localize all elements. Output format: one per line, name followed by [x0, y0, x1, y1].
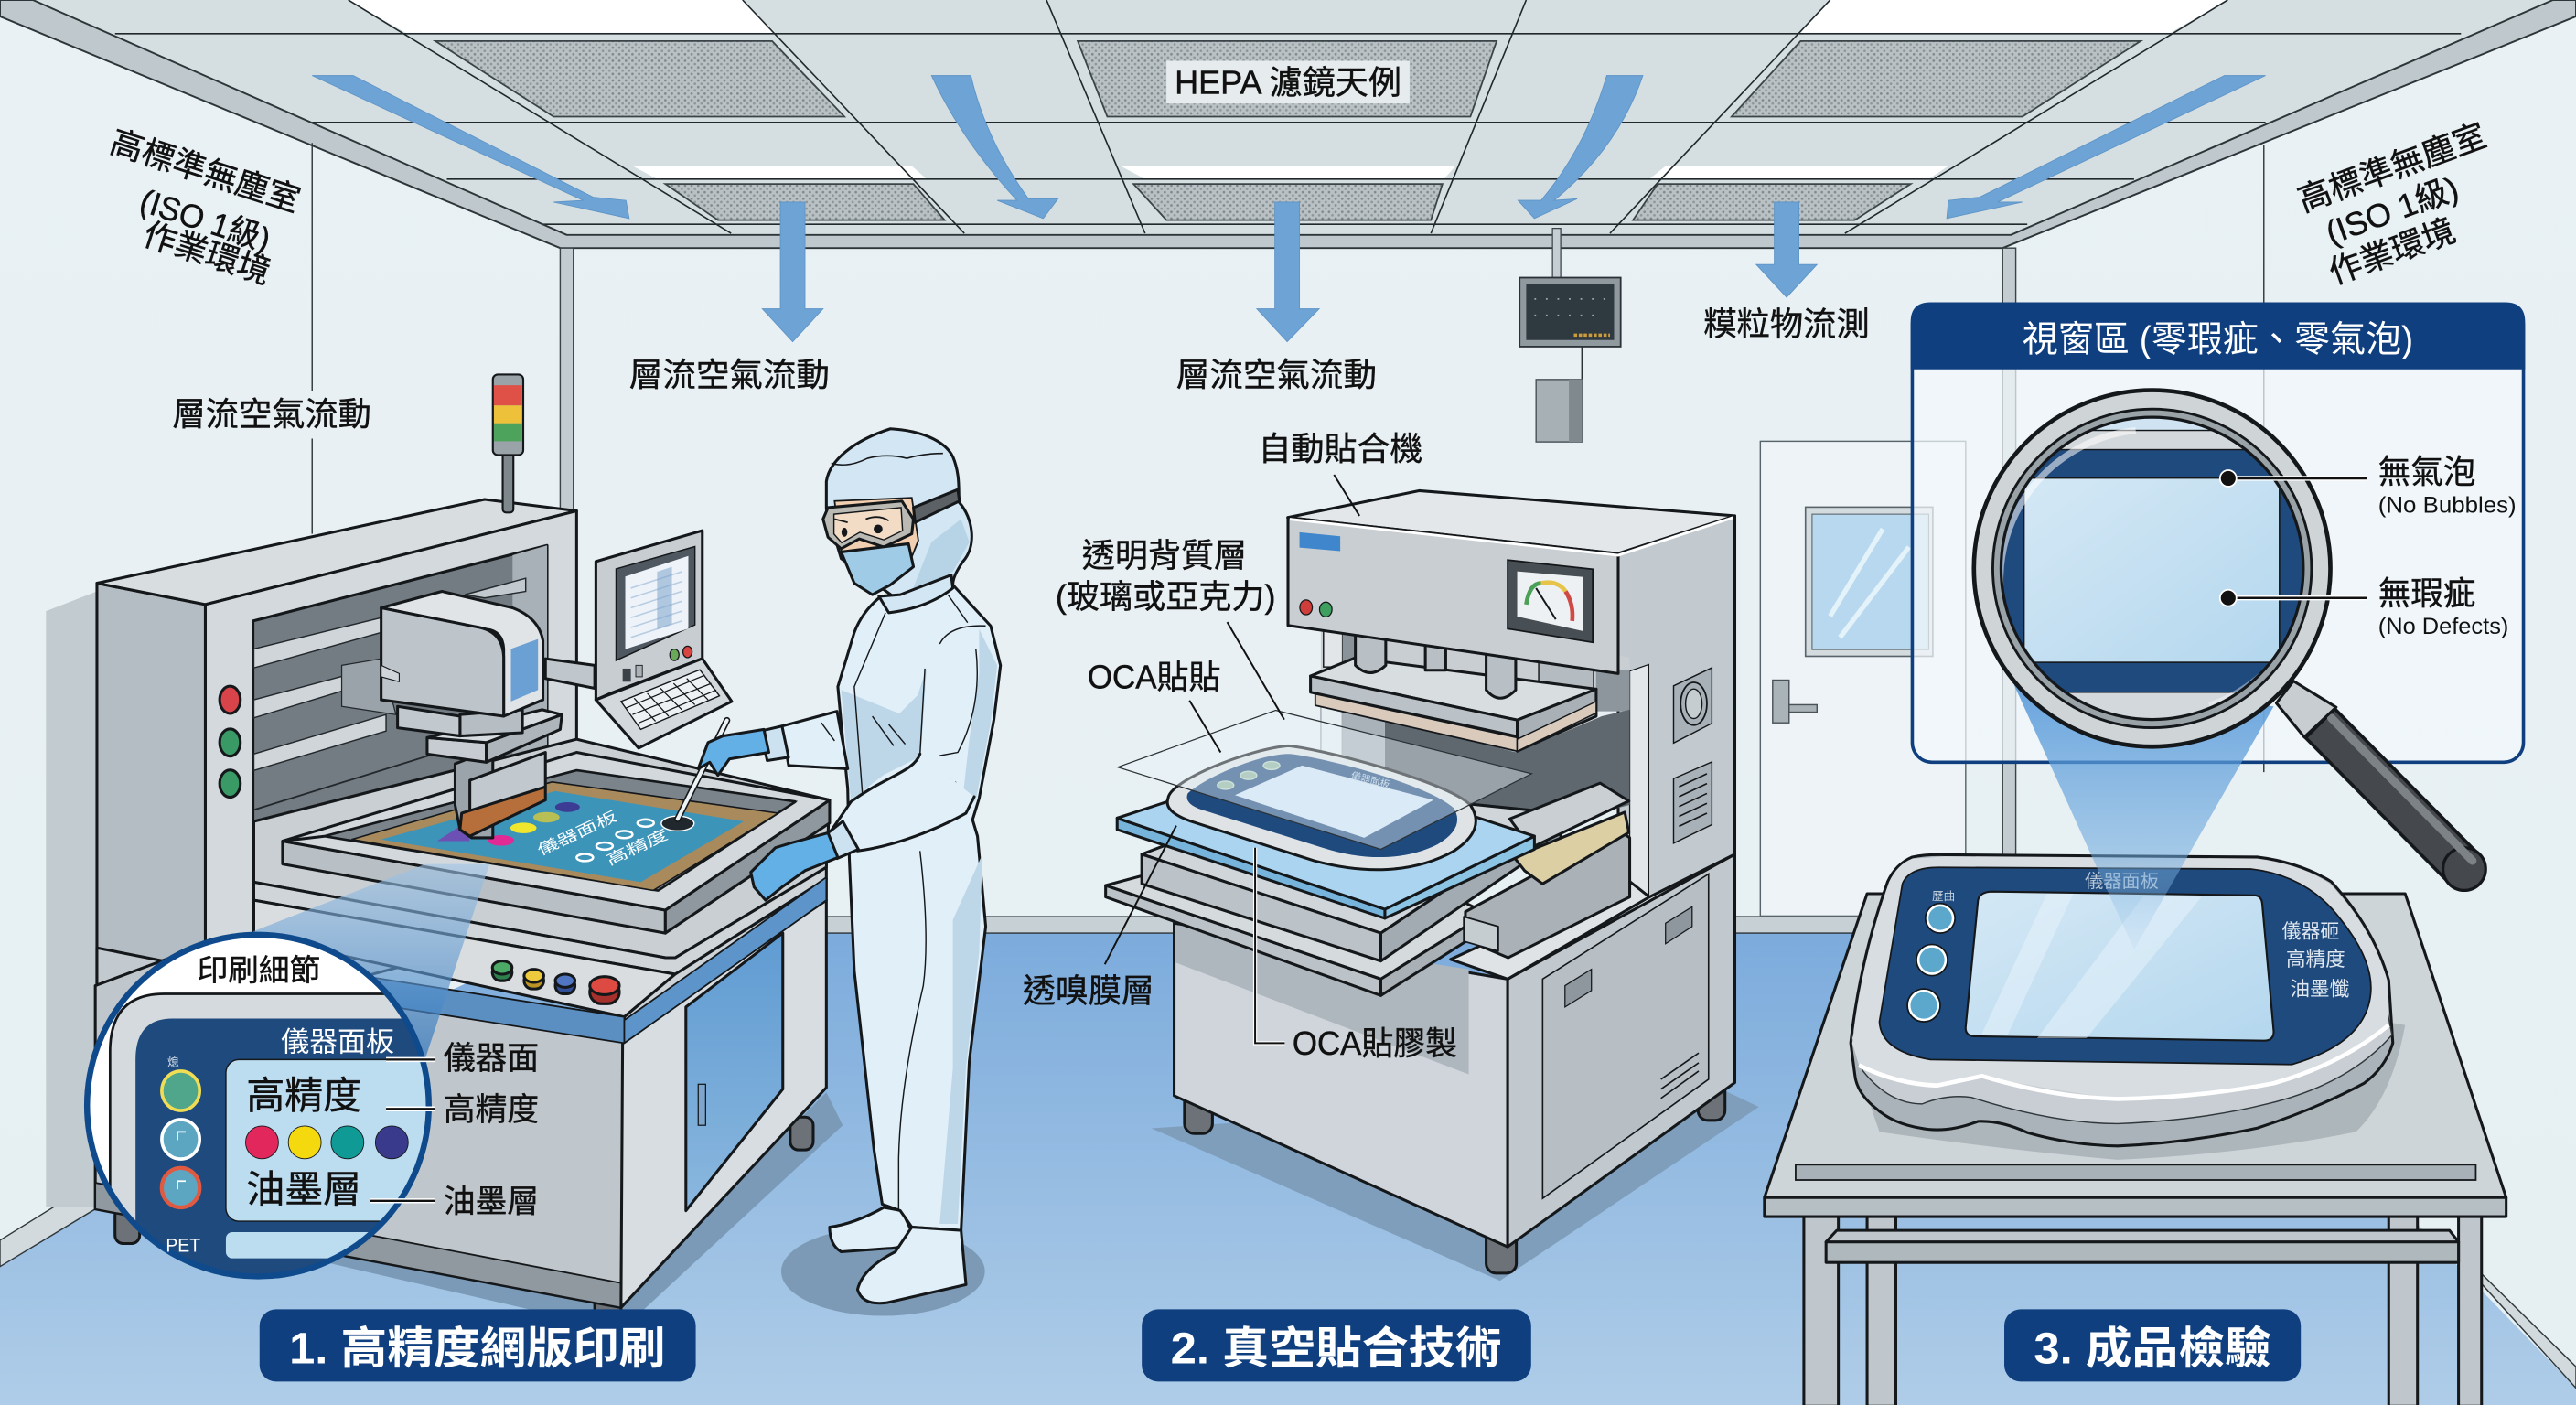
press dark cavity — [1385, 710, 1630, 830]
printed colour dots — [437, 802, 580, 846]
panel body — [1912, 306, 2524, 762]
label: left cleanroom note: 作業環境 — [139, 215, 275, 291]
callout: no bubbles: (No Bubbles) — [2378, 492, 2517, 518]
face — [834, 498, 918, 584]
machine 1 table — [253, 739, 830, 1043]
detail panel title: 儀器面板 — [281, 1026, 394, 1057]
press head front — [1288, 518, 1618, 673]
table slot — [1796, 1164, 2475, 1180]
tan film and rail — [1509, 783, 1629, 884]
machine 1 cabinet front — [95, 945, 624, 1308]
operator cuff — [828, 821, 858, 859]
machine 1 opening with rails — [253, 545, 547, 920]
callout: no bubbles: 無氣泡 — [2378, 453, 2475, 490]
lens ring — [2001, 417, 2303, 720]
table top — [1765, 894, 2506, 1197]
blue base plate — [1117, 759, 1534, 918]
printed panel text — [535, 809, 671, 869]
machine 1 tower light — [493, 374, 523, 512]
collar — [879, 575, 953, 613]
machine 2 floor shadow — [1152, 1090, 1759, 1281]
magnifier handle fill — [2322, 724, 2463, 867]
printed panel text: 高精度 — [604, 826, 671, 869]
wall corner posts and seams — [312, 143, 2264, 938]
hood shade — [912, 520, 970, 592]
goggle lens — [834, 508, 903, 542]
ink puddle — [661, 816, 694, 831]
finished instrument panel — [1851, 854, 2405, 1160]
detail leader: precision: 高精度 — [444, 1092, 539, 1128]
wand highlight — [678, 721, 727, 819]
press head buttons — [1300, 600, 1332, 617]
callout: no defects: (No Defects) — [2378, 614, 2508, 639]
print head — [381, 592, 562, 838]
hood cap seam — [832, 454, 943, 465]
callout: no defects: 無瑕疵 — [2378, 574, 2475, 612]
magnifier neck — [2276, 681, 2336, 737]
press cavity left panes — [1321, 698, 1385, 772]
magnifier handle end — [2443, 848, 2485, 890]
callout panel: viewing area — [1911, 302, 2525, 762]
operator floor shadow — [781, 1228, 985, 1316]
operator forearm — [830, 754, 974, 851]
label: lower film layer: 透嗅膜層 — [1023, 972, 1154, 1010]
step 3 heading: 3. 成品檢驗 — [2034, 1325, 2271, 1374]
transparent substrate sheet — [1118, 711, 1531, 849]
lens content — [2002, 419, 2302, 718]
lower deck — [1106, 830, 1487, 995]
goggles — [823, 501, 914, 549]
side block — [1451, 830, 1649, 979]
label: lower film layer — [1023, 826, 1176, 1010]
goggle strap — [914, 489, 960, 522]
label: right cleanroom note: 作業環境 — [2324, 211, 2460, 292]
callout: no defects — [2220, 574, 2508, 639]
label: right cleanroom note — [2293, 116, 2491, 292]
label: transparent substrate: 透明背質層 — [1082, 537, 1247, 574]
panel text: 高精度 — [2286, 948, 2345, 971]
magnifier rim — [1974, 391, 2331, 746]
HEPA filter panels — [435, 41, 2141, 220]
screen printing frame — [283, 753, 830, 933]
middle deck — [1142, 788, 1561, 961]
machine 2 cabinet door — [1542, 874, 1709, 1198]
detail contents — [108, 992, 426, 1273]
magnifying glass — [1971, 388, 2485, 890]
machine 1 front frame — [205, 511, 576, 1018]
label: OCA film: OCA貼貼 — [1088, 658, 1220, 695]
panel base — [1851, 854, 2393, 1146]
operator rear sleeve and cuff — [761, 712, 848, 768]
panel top face — [1852, 856, 2388, 1099]
detail circle base — [87, 935, 429, 1276]
panel window reflections — [1981, 894, 2202, 1038]
press plate — [1311, 658, 1596, 751]
particle sensor — [1519, 229, 1621, 442]
label: transparent substrate — [1056, 537, 1284, 720]
panel text — [1932, 872, 2349, 1000]
label: OCA bonding — [1255, 848, 1457, 1062]
panel navy bezel — [1880, 867, 2371, 1065]
baseboards — [0, 917, 2576, 1389]
label: right cleanroom note: (ISO 1級) — [2321, 169, 2463, 252]
pressing rods — [1356, 631, 1516, 698]
small panel on plate — [1167, 745, 1476, 870]
magnifier inner rim — [1992, 409, 2312, 728]
rear door — [1760, 441, 1966, 916]
operator rear shoe — [830, 1207, 914, 1251]
detail PET: PET — [166, 1233, 200, 1256]
label: right cleanroom note: 高標準無塵室 — [2293, 116, 2491, 219]
ceiling trim — [0, 0, 2576, 248]
step 2 heading: 2. 真空貼合技術 — [1171, 1325, 1501, 1374]
operator suit creases — [854, 595, 986, 1211]
detail ring — [87, 935, 429, 1276]
machine 1 control buttons — [492, 961, 619, 1003]
label: laminar flow left: 層流空氣流動 — [173, 395, 371, 433]
step 2 heading — [1142, 1309, 1531, 1381]
magnifier handle — [2320, 723, 2464, 869]
label: HEPA: HEPA 濾鏡天例 — [1175, 63, 1401, 101]
step 1 heading — [260, 1309, 696, 1381]
machine 1: screen printer — [46, 374, 843, 1331]
small panel text: 儀器面板 — [1350, 770, 1391, 791]
machine 1 top — [97, 499, 576, 605]
label: OCA film — [1088, 658, 1220, 753]
label: left cleanroom note — [106, 123, 305, 291]
pressure gauge — [1508, 560, 1593, 642]
panel highlight wave — [1859, 1025, 2388, 1099]
panel shadow — [1863, 1018, 2405, 1160]
magnifier handle highlight — [2331, 718, 2473, 861]
panel text: 油墨懺 — [2291, 977, 2349, 1000]
machine 2 feet — [1185, 1067, 1725, 1273]
panel window — [1966, 892, 2274, 1041]
upper glove — [698, 729, 768, 776]
eyes — [834, 517, 889, 537]
label: transparent substrate: (玻璃或亞克力) — [1056, 577, 1276, 615]
panel mid band — [1852, 986, 2392, 1123]
machine 2 cabinet front — [1175, 923, 1508, 1247]
ceiling — [33, 0, 2553, 235]
label: laminator: 自動貼合機 — [1259, 430, 1422, 467]
panel text: 歷曲 — [1932, 890, 1955, 903]
machine 2 column — [1618, 516, 1734, 897]
inspection table — [1765, 894, 2506, 1405]
label: particle monitor: 糢粒物流測 — [1703, 305, 1870, 342]
hood — [826, 429, 971, 598]
printed panel text: 儀器面板 — [535, 809, 619, 859]
step 1 heading: 1. 高精度網版印刷 — [289, 1325, 665, 1374]
print detail circle — [87, 935, 539, 1314]
detail title: 印刷細節 — [198, 954, 320, 988]
label: OCA bonding: OCA貼膠製 — [1293, 1024, 1457, 1062]
machine 1 floor shadow — [95, 1092, 843, 1331]
operator in cleanroom suit — [678, 429, 1001, 1316]
machine 1 side — [97, 584, 205, 1228]
table front edge — [1765, 1197, 2506, 1217]
label: laminar flow center: 層流空氣流動 — [1176, 356, 1377, 393]
table legs — [1804, 1216, 2482, 1405]
wand — [678, 721, 727, 819]
panel text: 儀器砸 — [2282, 919, 2339, 942]
inspection beam — [2014, 685, 2274, 949]
machine 1 feet — [115, 1117, 813, 1319]
detail high precision: 高精度 — [246, 1075, 361, 1117]
label: laminator — [1259, 430, 1422, 516]
machine 1 wall shadow — [46, 592, 97, 1207]
detail tiny label: 熄 — [167, 1056, 179, 1069]
console — [545, 531, 732, 748]
table crossbars — [1826, 1230, 2459, 1262]
panel buttons — [1907, 904, 1955, 1022]
airflow arrows — [312, 76, 2266, 342]
label: left cleanroom note: (ISO 1級) — [135, 181, 275, 259]
machine 2 cabinet side — [1508, 854, 1734, 1247]
lower glove — [751, 833, 838, 900]
detail ink layer: 油墨層 — [246, 1169, 361, 1211]
panel text: 儀器面板 — [2085, 872, 2159, 892]
press recess pillars — [1324, 631, 1630, 712]
detail leader: panel: 儀器面 — [444, 1041, 539, 1077]
floor — [0, 933, 2576, 1405]
step 3 heading — [2004, 1309, 2301, 1381]
machine 2 cabinet shadow — [1175, 925, 1469, 1075]
press head highlight — [1290, 518, 1733, 555]
press upper recess — [1321, 621, 1630, 710]
machine 2: vacuum laminator — [1106, 490, 1759, 1281]
beam from screen to detail lens — [253, 864, 489, 1058]
panel button rings — [1909, 906, 1953, 1020]
press head label plate — [1300, 532, 1340, 552]
operator suit — [838, 585, 1001, 1230]
panel header — [1911, 302, 2525, 370]
machine 1 cabinet side — [621, 900, 826, 1308]
callout: no bubbles — [2220, 453, 2517, 518]
press head top — [1288, 490, 1734, 553]
operator front shoe — [857, 1228, 966, 1303]
detail leader: ink: 油墨層 — [444, 1184, 539, 1219]
panel title: 視窗區 (零瑕疵、零氣泡) — [2023, 319, 2413, 359]
label: left cleanroom note: 高標準無塵室 — [106, 123, 305, 220]
machine 1 status buttons — [220, 686, 241, 798]
label: laminar flow middle: 層流空氣流動 — [629, 356, 830, 393]
face mask — [842, 543, 914, 595]
operator suit shading — [842, 629, 997, 1224]
